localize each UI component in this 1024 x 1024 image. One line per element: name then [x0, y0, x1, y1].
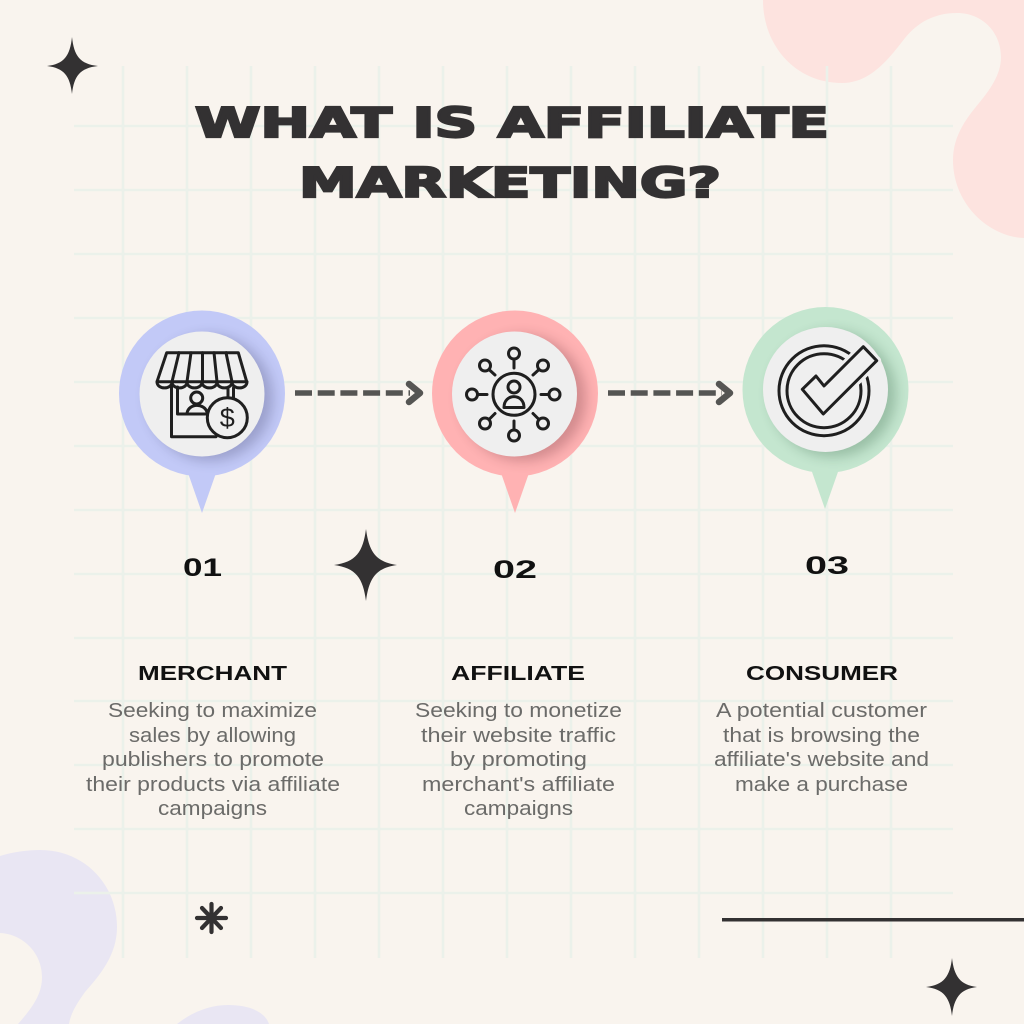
- icon: check mark in double ring: [779, 346, 877, 436]
- title: WHAT IS AFFILIATE: [195, 99, 829, 147]
- divider line bottom right: [722, 918, 1024, 922]
- text: merchant description: sales by allowing: [129, 725, 296, 747]
- heading: consumer: CONSUMER: [746, 663, 899, 685]
- icon: store with dollar coin: [157, 353, 247, 438]
- blob: pink top right: [763, 0, 1024, 238]
- text: merchant description: campaigns: [158, 798, 267, 820]
- title: MARKETING?: [299, 159, 721, 207]
- arrow: merchant to affiliate: [295, 384, 420, 402]
- icon: sparkle top left: [47, 37, 98, 94]
- text: merchant description: publishers to promote: [102, 749, 324, 771]
- text: affiliate description: [415, 700, 622, 820]
- text: affiliate description: merchant's affiliate: [422, 774, 615, 796]
- text: consumer description: make a purchase: [735, 774, 908, 796]
- text: affiliate description: their website traffic: [421, 725, 616, 747]
- text: affiliate description: campaigns: [464, 798, 573, 820]
- text: consumer description: A potential customer: [716, 700, 927, 722]
- text: affiliate description: by promoting: [450, 749, 587, 771]
- heading: affiliate: AFFILIATE: [451, 663, 585, 685]
- number 01: 01: [183, 554, 222, 582]
- icon: sparkle bottom right: [926, 958, 977, 1016]
- text: merchant description: [86, 700, 340, 820]
- icon: network around a person: [466, 348, 560, 441]
- arrow: affiliate to consumer: [608, 384, 730, 402]
- panel: consumer pin: [742, 307, 908, 509]
- text: merchant description: their products via affiliate: [86, 774, 340, 796]
- panel: affiliate pin: [432, 310, 598, 513]
- icon: store with dollar coin: $: [220, 403, 235, 433]
- blob: lavender bottom left: [0, 850, 269, 1024]
- title: [195, 99, 829, 207]
- text: consumer description: affiliate's website and: [714, 749, 929, 771]
- icon: asterisk: [197, 904, 226, 932]
- text: consumer description: [714, 700, 929, 796]
- text: consumer description: that is browsing the: [723, 725, 920, 747]
- text: merchant description: Seeking to maximize: [108, 700, 317, 722]
- heading: merchant: MERCHANT: [138, 663, 287, 685]
- text: affiliate description: Seeking to monetize: [415, 700, 622, 722]
- number 03: 03: [805, 552, 849, 580]
- icon: sparkle center: [334, 529, 397, 601]
- panel: merchant pin: [119, 310, 285, 513]
- number 02: 02: [493, 556, 537, 584]
